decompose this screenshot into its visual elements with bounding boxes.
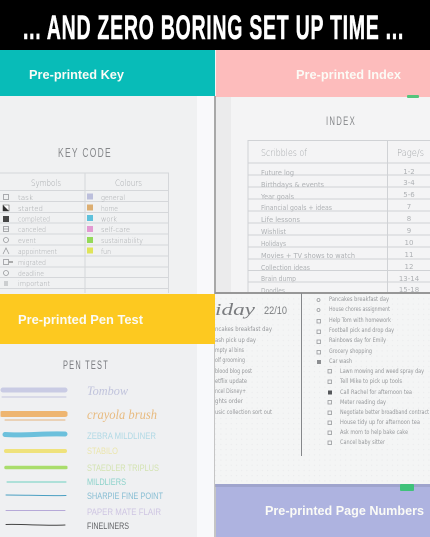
key code table: migrated (18, 259, 46, 267)
pen test page (0, 344, 216, 537)
page tab (400, 484, 414, 491)
index table: Future log (261, 169, 294, 177)
key code table: task (18, 194, 33, 202)
index table: 11 (405, 251, 413, 259)
key header band (0, 50, 215, 96)
key code table: home (101, 205, 118, 213)
daily page (215, 292, 430, 484)
index table (248, 140, 430, 295)
key code table: appointment (18, 248, 57, 256)
index table: Collection ideas (261, 264, 310, 272)
key code table: fun (101, 248, 111, 256)
pen names: STAEDLER TRIPLUS (87, 463, 159, 473)
panel: pre-printed index (216, 50, 430, 295)
right task list: Tell Mike to pick up tools (339, 378, 402, 385)
pen names: ZEBRA MILDLINER (87, 431, 156, 441)
index table: Movies + TV shows to watch (261, 252, 355, 260)
index table: 7 (407, 203, 411, 211)
index table: Year goals (260, 193, 294, 201)
right task list: Cancel baby sitter (340, 439, 385, 446)
key code table: Symbols (31, 179, 61, 189)
task checkboxes (317, 298, 332, 444)
panel: pre-printed pen test (0, 294, 216, 537)
index table: 9 (407, 227, 411, 235)
key code table: started (18, 205, 43, 213)
left task list: olf grooming (215, 357, 245, 364)
page numbers header band: Pre-printed Page Numbers (265, 504, 424, 518)
key code table: sustainability (101, 237, 143, 245)
index table: Financial goals + ideas (261, 204, 332, 212)
index table: Wishlist (261, 228, 286, 236)
left task list: ghts order (215, 398, 243, 405)
index table: Life lessons (261, 216, 300, 224)
index table: 12 (405, 263, 413, 271)
index table: Scribbles of (261, 148, 307, 159)
index table: 1-2 (403, 168, 415, 176)
right task list: Car wash (329, 358, 352, 365)
key code table: canceled (18, 226, 46, 234)
pen names (87, 383, 163, 531)
key code table: important (18, 280, 50, 288)
right task list: Football pick and drop day (329, 327, 394, 334)
index header band (216, 50, 430, 97)
left task list: usic collection sort out (215, 409, 273, 416)
page numbers header band (215, 484, 430, 537)
pen names: MILDLIERS (87, 477, 126, 487)
left task list: ncel Disney+ (215, 388, 246, 395)
index heading: INDEX (326, 114, 356, 128)
key code table: deadline (18, 270, 44, 278)
key header band: Pre-printed Key (29, 68, 124, 82)
index table: Page/s (397, 148, 424, 159)
pen names: SHARPIE FINE POINT (87, 491, 163, 501)
right task list: Pancakes breakfast day (329, 296, 389, 303)
key code table: self-care (101, 226, 130, 234)
key code table: general (101, 194, 125, 202)
index table: 3-4 (403, 179, 415, 187)
left task list (215, 326, 273, 416)
right task list: Meter reading day (340, 399, 386, 406)
index table: Brain dump (261, 275, 296, 283)
right task list: Ask mom to help bake cake (340, 429, 408, 436)
right task list: Grocery shopping (329, 348, 372, 355)
index table: Birthdays & events (261, 181, 324, 189)
left task list: mpty al bins (215, 347, 244, 354)
index page (216, 97, 430, 294)
left task list: ncakes breakfast day (215, 326, 272, 333)
pen test heading: PEN TEST (63, 358, 109, 372)
index table: 15-18 (399, 286, 419, 294)
pen names: FINELINERS (87, 521, 129, 531)
index table: Doodles (261, 287, 285, 295)
key page (0, 96, 216, 294)
key code table: completed (18, 216, 50, 224)
key code table: event (18, 237, 36, 245)
right task list: House chores assignment (329, 306, 390, 313)
pen names: PAPER MATE FLAIR (87, 507, 161, 517)
pen names: crayola brush (87, 408, 157, 423)
key code table: Colours (115, 179, 142, 189)
key code table: work (101, 216, 117, 224)
pen test header band (0, 294, 215, 344)
index table: 5-6 (403, 191, 415, 199)
right task list: Help Tom with homework (329, 317, 391, 324)
pen strokes (2, 390, 66, 525)
panel: pre-printed key (0, 50, 216, 294)
index table: Holidays (261, 240, 286, 248)
index table: 10 (405, 239, 413, 247)
panel: pre-printed page numbers (215, 292, 430, 537)
right task list: Call Rachel for afternoon tea (340, 389, 412, 396)
left task list: ash pick up day (215, 337, 256, 344)
right task list: Rainbows day for Emily (329, 337, 386, 344)
index header band: Pre-printed Index (296, 68, 401, 82)
key code table (0, 173, 169, 293)
right task list (329, 296, 430, 446)
key code heading: KEY CODE (58, 145, 112, 160)
date heading: 22/10 (264, 305, 287, 317)
pen names: Tombow (87, 383, 128, 398)
index table: 8 (407, 215, 411, 223)
pen test header band: Pre-printed Pen Test (18, 313, 144, 327)
left task list: etflix update (215, 378, 247, 385)
left task list: blood blog post (215, 368, 253, 375)
date heading: iday (215, 300, 256, 319)
pen names: STABILO (87, 446, 118, 456)
index tab (407, 95, 419, 98)
date heading (215, 300, 287, 319)
index table: 13-14 (399, 275, 420, 283)
